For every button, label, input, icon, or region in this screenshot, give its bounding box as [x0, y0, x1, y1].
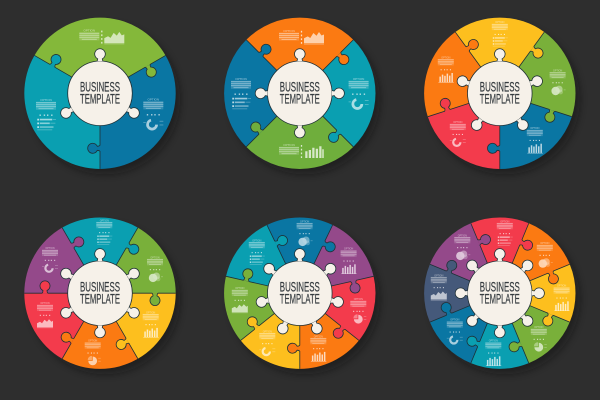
text block: left with area chart [232, 287, 248, 313]
puzzle piece: teal [62, 195, 157, 293]
puzzle piece: red [471, 203, 549, 293]
text block: right with bubbles [550, 69, 566, 95]
text block: upper left with list [249, 239, 265, 265]
text block: upper right with bars: OPTION [344, 248, 353, 251]
puzzle piece: slate [409, 244, 500, 322]
puzzle piece: green [479, 293, 570, 372]
puzzle piece: green [246, 93, 353, 200]
puzzle piece: yellow [241, 293, 300, 369]
puzzle piece: red [5, 260, 100, 359]
text block: upper left with bubbles [454, 234, 470, 260]
puzzle piece: orange [43, 293, 138, 392]
panel: six-piece puzzle circle [5, 195, 195, 392]
text block: top with area chart [279, 29, 324, 44]
puzzle joints [424, 25, 572, 169]
puzzle joints [226, 220, 376, 369]
center hub: BUSINESS [280, 80, 320, 95]
panel: four-piece puzzle circle [193, 0, 407, 200]
puzzle joints [34, 45, 172, 169]
center hub [255, 249, 344, 336]
center hub: TEMPLATE [80, 292, 120, 307]
text block: top with list [492, 21, 508, 47]
puzzle piece: blue [478, 93, 572, 185]
puzzle piece: blue [267, 199, 353, 293]
text block: upper right with bubbles: OPTION [150, 256, 160, 259]
text block: left with bars: OPTION [441, 56, 451, 59]
text block: upper right with bars [341, 248, 357, 274]
text block: lower right with pie: OPTION [534, 326, 544, 329]
center hub [59, 249, 141, 338]
text block: top with area chart: OPTION [283, 29, 295, 33]
puzzle piece: red [300, 276, 387, 351]
text block: lower left with area chart: OPTION [40, 302, 50, 305]
text block: top with list: OPTION [100, 219, 109, 222]
puzzle joints [238, 31, 362, 156]
text block: lower right with bars: OPTION [146, 311, 156, 314]
text block: left with area chart: OPTION [434, 274, 444, 277]
text block: top with list [497, 220, 513, 246]
puzzle joints [425, 219, 574, 368]
text block: right with bars [554, 285, 570, 311]
text block: upper left with list: OPTION [252, 239, 262, 242]
text block: right with donut [143, 98, 163, 129]
center hub: TEMPLATE [280, 92, 320, 107]
center hub [455, 249, 544, 338]
puzzle piece: purple [24, 228, 100, 293]
puzzle piece: red [428, 93, 500, 169]
puzzle piece: green [34, 0, 171, 112]
text block: left with list [36, 98, 56, 130]
panel: three-piece puzzle circle [24, 0, 203, 178]
center hub: TEMPLATE [480, 92, 520, 107]
text block: left with area chart [431, 274, 447, 300]
panel: eight-piece puzzle circle [409, 203, 590, 384]
center hub: BUSINESS [280, 280, 320, 295]
puzzle piece: blue [421, 273, 500, 363]
center hub: BUSINESS [480, 280, 520, 295]
text block: lower right with pie [531, 326, 547, 352]
text block: bottom with bars: OPTION [489, 340, 498, 343]
text block: bottom with pie [85, 340, 101, 365]
text block: upper right with bubbles [147, 256, 163, 282]
text block: left with list: OPTION [40, 98, 52, 102]
text block: top with bubbles [297, 220, 313, 246]
text block: bottom with bars [485, 340, 501, 366]
text block: top with area chart: OPTION [84, 29, 95, 33]
text block: bottom with bar chart: OPTION [283, 143, 295, 147]
text block: right with bubbles: OPTION [553, 69, 562, 72]
text block: upper right with bubbles: OPTION [540, 242, 550, 245]
text block: right with donut: OPTION [353, 77, 364, 81]
puzzle piece: teal [24, 55, 100, 169]
center hub [59, 49, 141, 126]
puzzle piece: orange [246, 0, 353, 93]
text block: top with list [96, 219, 112, 245]
center hub: BUSINESS [80, 280, 120, 295]
center hub: TEMPLATE [280, 292, 320, 307]
puzzle piece: blue [193, 40, 300, 147]
puzzle piece: yellow [455, 0, 558, 93]
text block: lower right with bars: OPTION [314, 335, 323, 338]
puzzle piece: teal [226, 219, 313, 293]
text block: upper left with donut: OPTION [45, 247, 55, 250]
center hub: TEMPLATE [480, 292, 520, 307]
puzzle piece: teal [450, 293, 529, 384]
text block: left with list: OPTION [235, 77, 247, 81]
text block: lower left with donut [259, 330, 275, 355]
puzzle piece: purple [430, 215, 520, 293]
text block: upper left with donut [42, 247, 58, 272]
puzzle piece: purple [300, 225, 386, 319]
text block: left with list [231, 77, 251, 109]
text block: lower left with area chart [37, 302, 53, 328]
puzzle piece: orange [500, 223, 578, 314]
panel: seven-piece puzzle circle [204, 199, 387, 387]
text block: left with bars [438, 56, 454, 83]
text block: upper right with bubbles [537, 242, 553, 268]
text block: lower right with bars: OPTION [530, 127, 540, 130]
center hub [456, 49, 544, 132]
text block: top with bubbles: OPTION [300, 220, 309, 223]
text block: right with pie [350, 298, 366, 324]
puzzle piece: orange [406, 25, 500, 117]
text block: lower right with bars [310, 335, 326, 362]
text block: right with pie: OPTION [354, 298, 363, 301]
center hub [255, 49, 344, 138]
text block: right with donut [349, 77, 369, 108]
text block: lower left with donut: OPTION [453, 121, 463, 124]
puzzle piece: teal [300, 40, 407, 147]
text block: lower right with bars [143, 311, 159, 338]
text block: top with list: OPTION [495, 21, 505, 24]
text block: bottom with bar chart [279, 143, 324, 158]
panel: five-piece puzzle circle [406, 0, 600, 185]
center hub: TEMPLATE [80, 92, 120, 107]
puzzle piece: green [204, 247, 300, 340]
text block: lower left with donut [450, 121, 466, 146]
text block: left with area chart: OPTION [235, 287, 245, 290]
puzzle piece: orange [263, 293, 359, 387]
puzzle piece: green [500, 32, 600, 136]
text block: upper left with bubbles: OPTION [458, 234, 467, 237]
puzzle joints [24, 221, 176, 365]
text block: lower left with donut: OPTION [263, 330, 272, 333]
puzzle piece: blue [67, 55, 203, 178]
puzzle piece: green [100, 228, 195, 326]
text block: lower right with bars [527, 127, 543, 153]
center hub: BUSINESS [80, 80, 120, 95]
center hub: BUSINESS [480, 80, 520, 95]
text block: lower left with donut [447, 319, 463, 344]
text block: right with bars: OPTION [557, 285, 566, 288]
text block: bottom with pie: OPTION [88, 340, 98, 343]
puzzle piece: yellow [500, 264, 590, 343]
text block: right with donut: OPTION [148, 98, 159, 102]
text block: lower left with donut: OPTION [450, 319, 460, 322]
text block: top with list: OPTION [500, 220, 510, 223]
text block: top with area chart [79, 29, 124, 44]
puzzle piece: yellow [100, 293, 176, 359]
